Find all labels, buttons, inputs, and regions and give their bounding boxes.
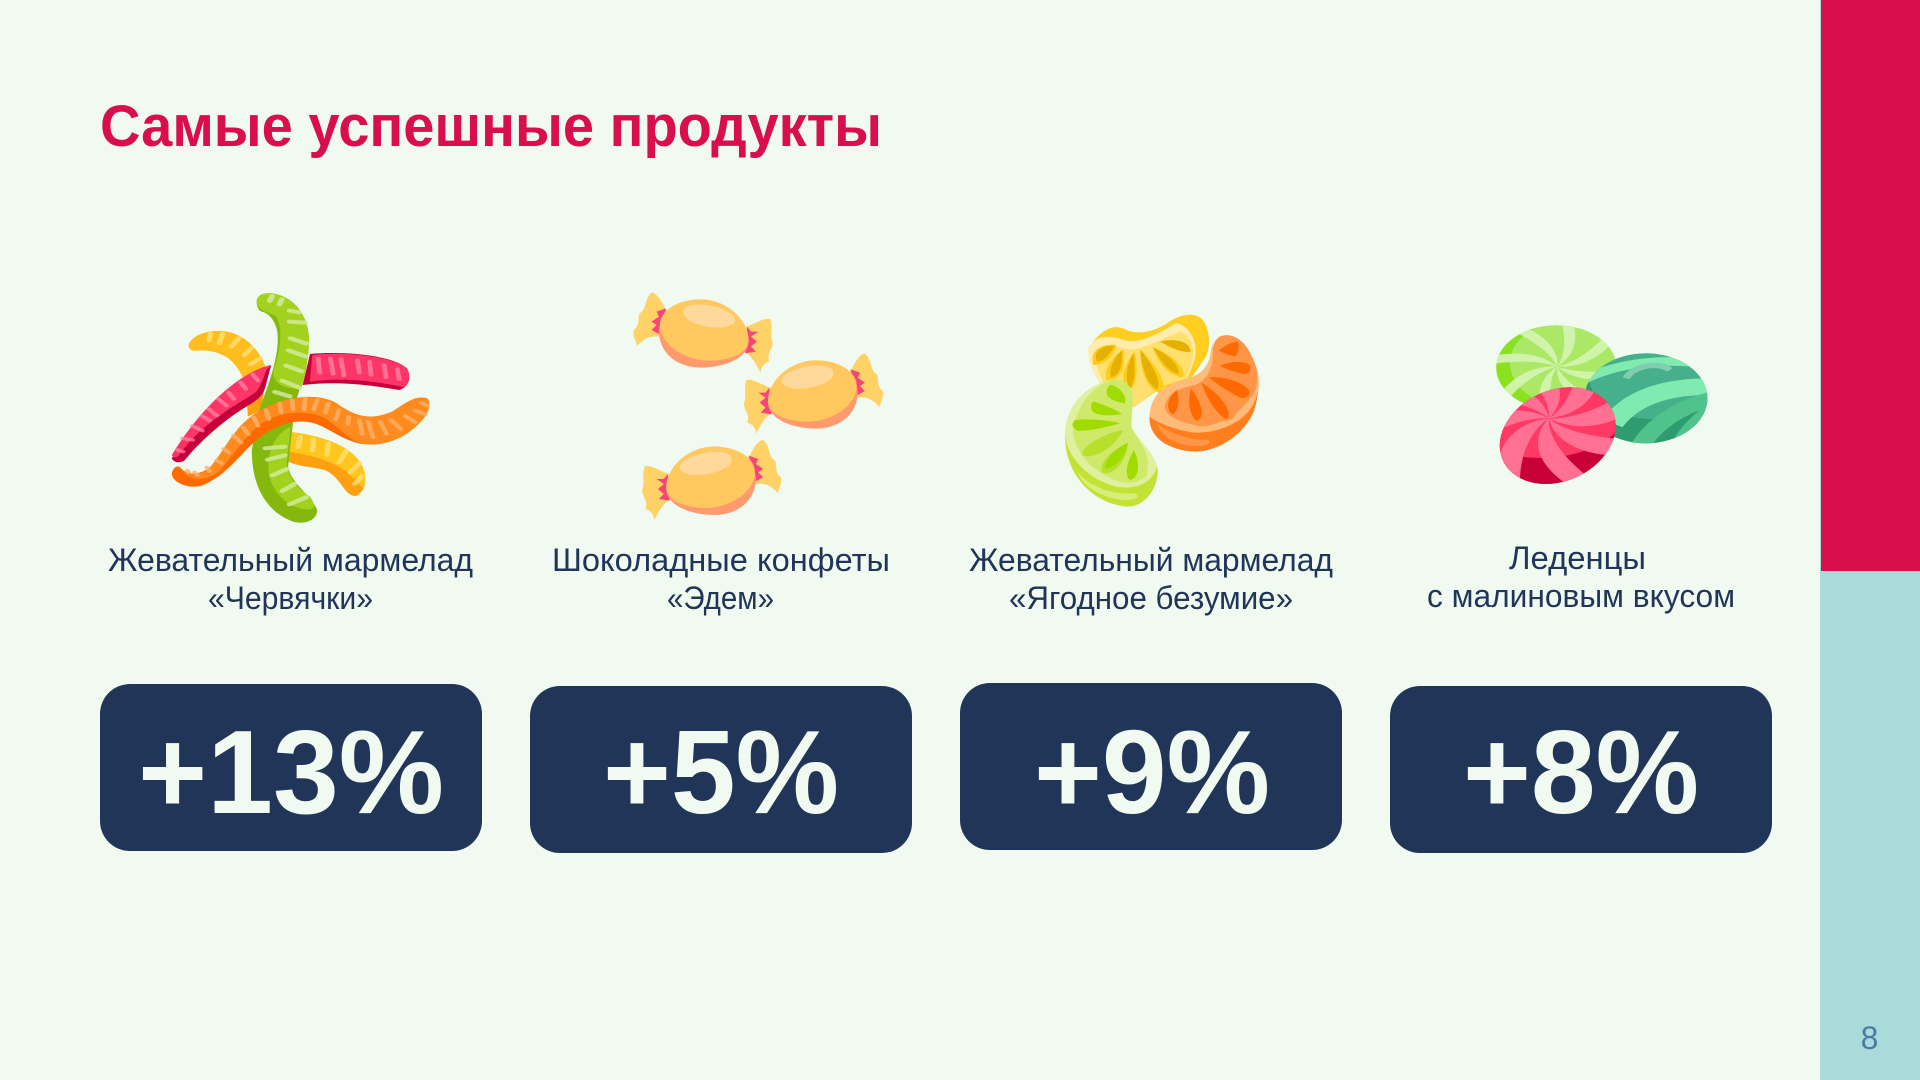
illustration: gummy worms xyxy=(172,293,429,523)
illustration: citrus jelly slices xyxy=(1065,315,1259,507)
label: lollipops xyxy=(1427,540,1735,614)
badge: +8% xyxy=(1390,686,1772,853)
sidebar xyxy=(1820,0,1920,1080)
red candy xyxy=(1500,387,1616,484)
label: berry madness: «Ягодное безумие» xyxy=(1009,580,1293,616)
label: chocolate candies: «Эдем» xyxy=(667,580,774,616)
title: Самые успешные продукты xyxy=(100,94,882,159)
label: lollipops: Леденцы xyxy=(1509,540,1646,576)
label: berry madness xyxy=(969,542,1333,616)
badge: +5%: +5% xyxy=(603,706,839,839)
green candy xyxy=(1496,325,1616,404)
badge: +13% xyxy=(100,684,482,851)
page number: 8 xyxy=(1861,1020,1878,1056)
illustration: striped lollipop candies xyxy=(1496,325,1708,484)
illustration: wrapped candies xyxy=(633,293,883,520)
badge: +5% xyxy=(530,686,912,853)
label: berry madness: Жевательный мармелад xyxy=(969,542,1333,578)
badge: +9% xyxy=(960,683,1342,850)
label: lollipops: с малиновым вкусом xyxy=(1427,578,1735,614)
label: worms: Жевательный мармелад xyxy=(108,542,473,578)
label: worms: «Червячки» xyxy=(208,580,373,616)
label: worms xyxy=(108,542,473,616)
teal candy xyxy=(1586,353,1708,444)
label: chocolate candies: Шоколадные конфеты xyxy=(552,542,890,578)
badge: +9%: +9% xyxy=(1034,706,1270,839)
badge: +8%: +8% xyxy=(1463,706,1699,839)
label: chocolate candies xyxy=(552,542,890,616)
badge: +13%: +13% xyxy=(138,706,444,839)
